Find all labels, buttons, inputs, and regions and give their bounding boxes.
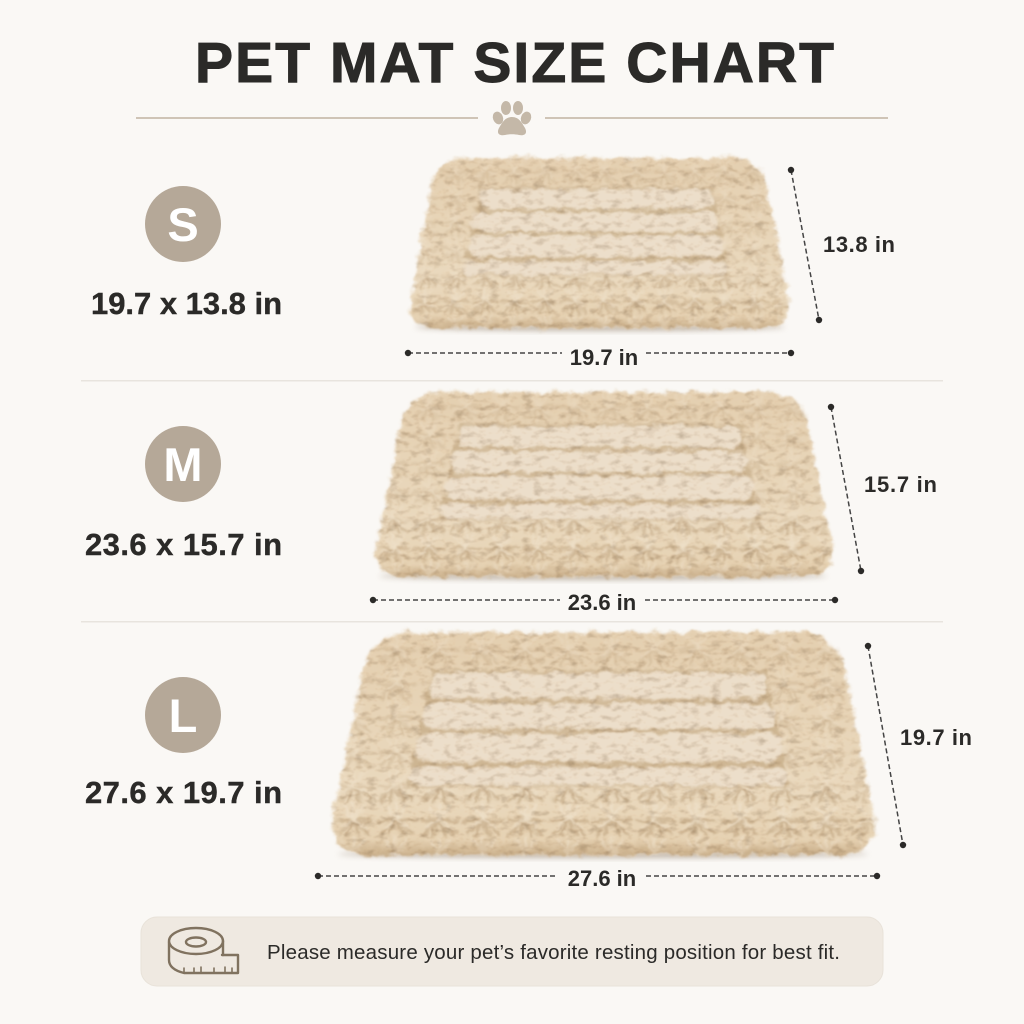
row divider (81, 380, 943, 382)
title divider with paw (136, 101, 888, 135)
width dimension S: 19.7 in (570, 345, 638, 370)
badge M (145, 426, 221, 502)
callout: measuring note (141, 917, 883, 986)
height dimension S (788, 167, 895, 323)
row divider (81, 621, 943, 622)
icon: measuring tape (169, 928, 238, 973)
size label S: 19.7 x 13.8 in (91, 286, 282, 321)
panel: size L (85, 632, 972, 891)
width dimension S (405, 345, 794, 370)
icon: paw print (491, 101, 533, 135)
panel: size M (85, 392, 937, 615)
height dimension S: 13.8 in (823, 232, 895, 257)
mat L (333, 632, 875, 858)
badge S (145, 186, 221, 262)
badge L: L (169, 689, 197, 742)
height dimension L: 19.7 in (900, 725, 972, 750)
badge M: M (163, 438, 203, 491)
mat S (411, 158, 788, 331)
badge S: S (167, 198, 199, 251)
height dimension M: 15.7 in (864, 472, 937, 497)
size label L: 27.6 x 19.7 in (85, 775, 282, 810)
width dimension M (370, 590, 838, 615)
note text: Please measure your pet’s favorite resting position for best fit. (267, 941, 840, 964)
height dimension L (865, 643, 972, 848)
panel: size S (91, 158, 895, 370)
mat M (376, 392, 833, 580)
size label M: 23.6 x 15.7 in (85, 527, 282, 562)
badge L (145, 677, 221, 753)
title: PET MAT SIZE CHART (195, 31, 834, 95)
width dimension M: 23.6 in (568, 590, 636, 615)
width dimension L: 27.6 in (568, 866, 636, 891)
height dimension M (828, 404, 937, 574)
width dimension L (315, 866, 880, 891)
